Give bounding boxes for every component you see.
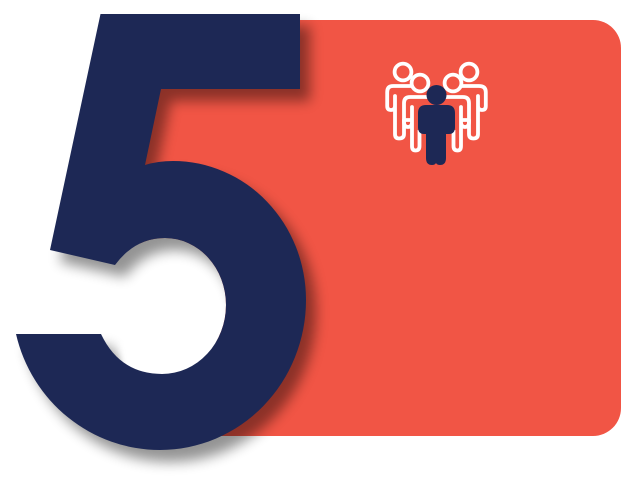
shadow fade inside lower counter [122, 340, 232, 385]
front person [418, 85, 455, 165]
middle left person [404, 75, 428, 150]
icon: group of people with leader [387, 64, 486, 165]
counter opening of the five [0, 238, 226, 374]
middle right person [445, 75, 469, 150]
drop shadow of the five [26, 26, 316, 462]
back left person [387, 64, 412, 138]
back right person [460, 64, 486, 138]
panel: red card [140, 20, 621, 436]
large numeral five [16, 14, 306, 450]
